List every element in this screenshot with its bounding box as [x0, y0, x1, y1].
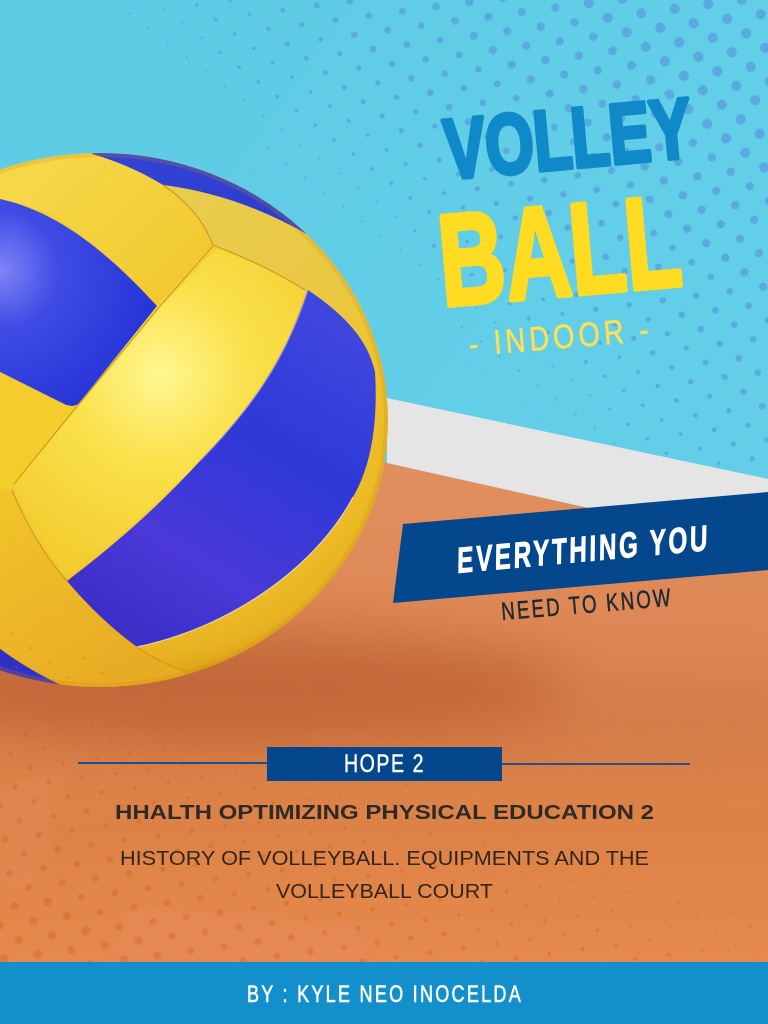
subtitle: INDOOR: - INDOOR - — [467, 311, 654, 364]
heading: course name: HHALTH OPTIMIZING PHYSICAL EDUCATION 2 — [115, 802, 654, 824]
halftone dots on sky — [76, 0, 768, 466]
course tag: HOPE 2 with rule lines — [78, 747, 690, 781]
footer bar with author: BY : KYLE NEO INOCELDA — [247, 981, 523, 1008]
white court line — [387, 398, 768, 548]
banner: everything you — [393, 492, 768, 603]
volleyball — [0, 140, 400, 700]
description text: HISTORY OF VOLLEYBALL. EQUIPMENTS AND THE — [120, 848, 649, 870]
description text — [120, 848, 649, 903]
tagline: need to know: NEED TO KNOW — [500, 584, 674, 626]
description text: VOLLEYBALL COURT — [276, 881, 493, 903]
halftone dots on court and lower ball — [0, 632, 756, 962]
course tag: HOPE 2 with rule lines: HOPE 2 — [344, 750, 425, 778]
footer bar with author — [0, 962, 768, 1024]
